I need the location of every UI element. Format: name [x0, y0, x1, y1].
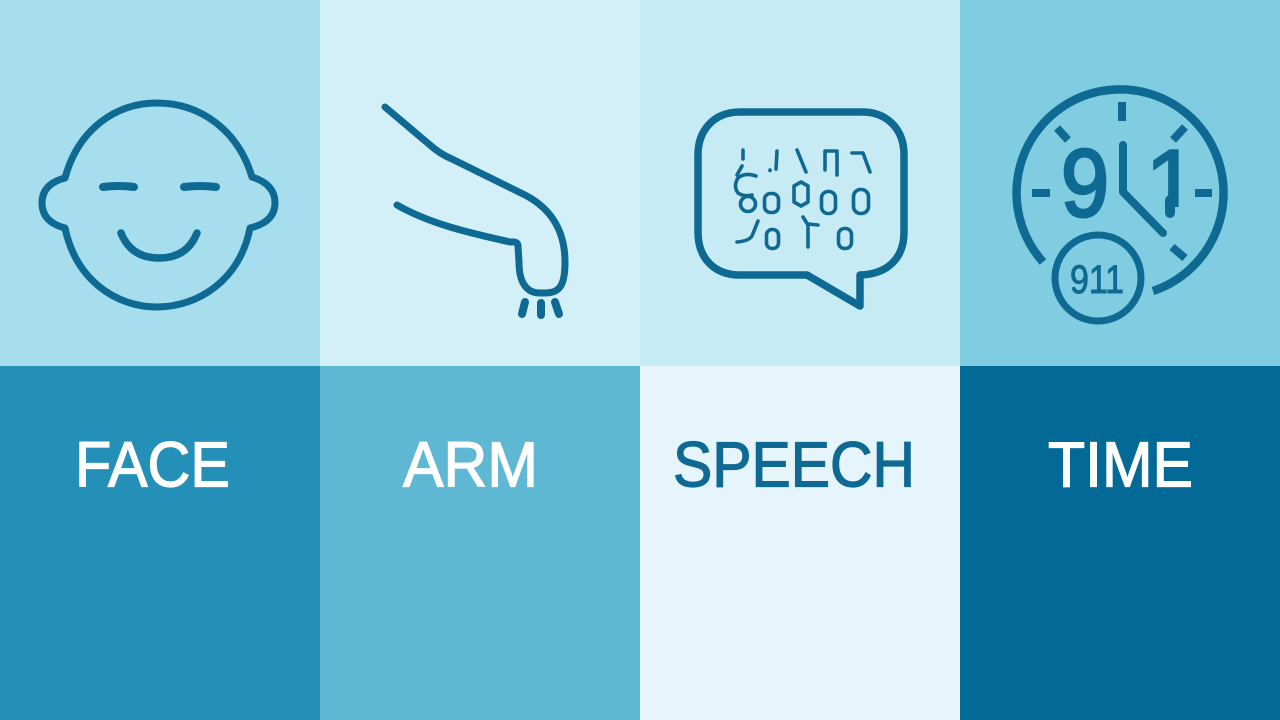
- heading: SPEECH: SPEECH: [673, 428, 915, 500]
- icon: smiling face: [42, 103, 275, 307]
- panel: speech: [640, 0, 960, 720]
- heading: ARM: ARM: [403, 428, 538, 500]
- icon: speech bubble: [698, 112, 904, 306]
- numerals 9 and 1: [1064, 148, 1179, 218]
- panel: time: [960, 0, 1280, 720]
- badge: 911: 911: [1070, 258, 1124, 302]
- heading: TIME: TIME: [1048, 428, 1193, 500]
- panel: arm: [320, 0, 640, 720]
- garbled speech glyphs: [736, 150, 870, 248]
- heading: FACE: FACE: [75, 428, 230, 500]
- icon: drooping arm: [385, 107, 565, 315]
- panel: face: [0, 0, 320, 720]
- icon: clock with 911: [1017, 89, 1224, 321]
- badge: 911: [1055, 235, 1141, 321]
- numerals 9 and 1: 1: [1145, 130, 1198, 237]
- numerals 9 and 1: 9: [1061, 130, 1109, 237]
